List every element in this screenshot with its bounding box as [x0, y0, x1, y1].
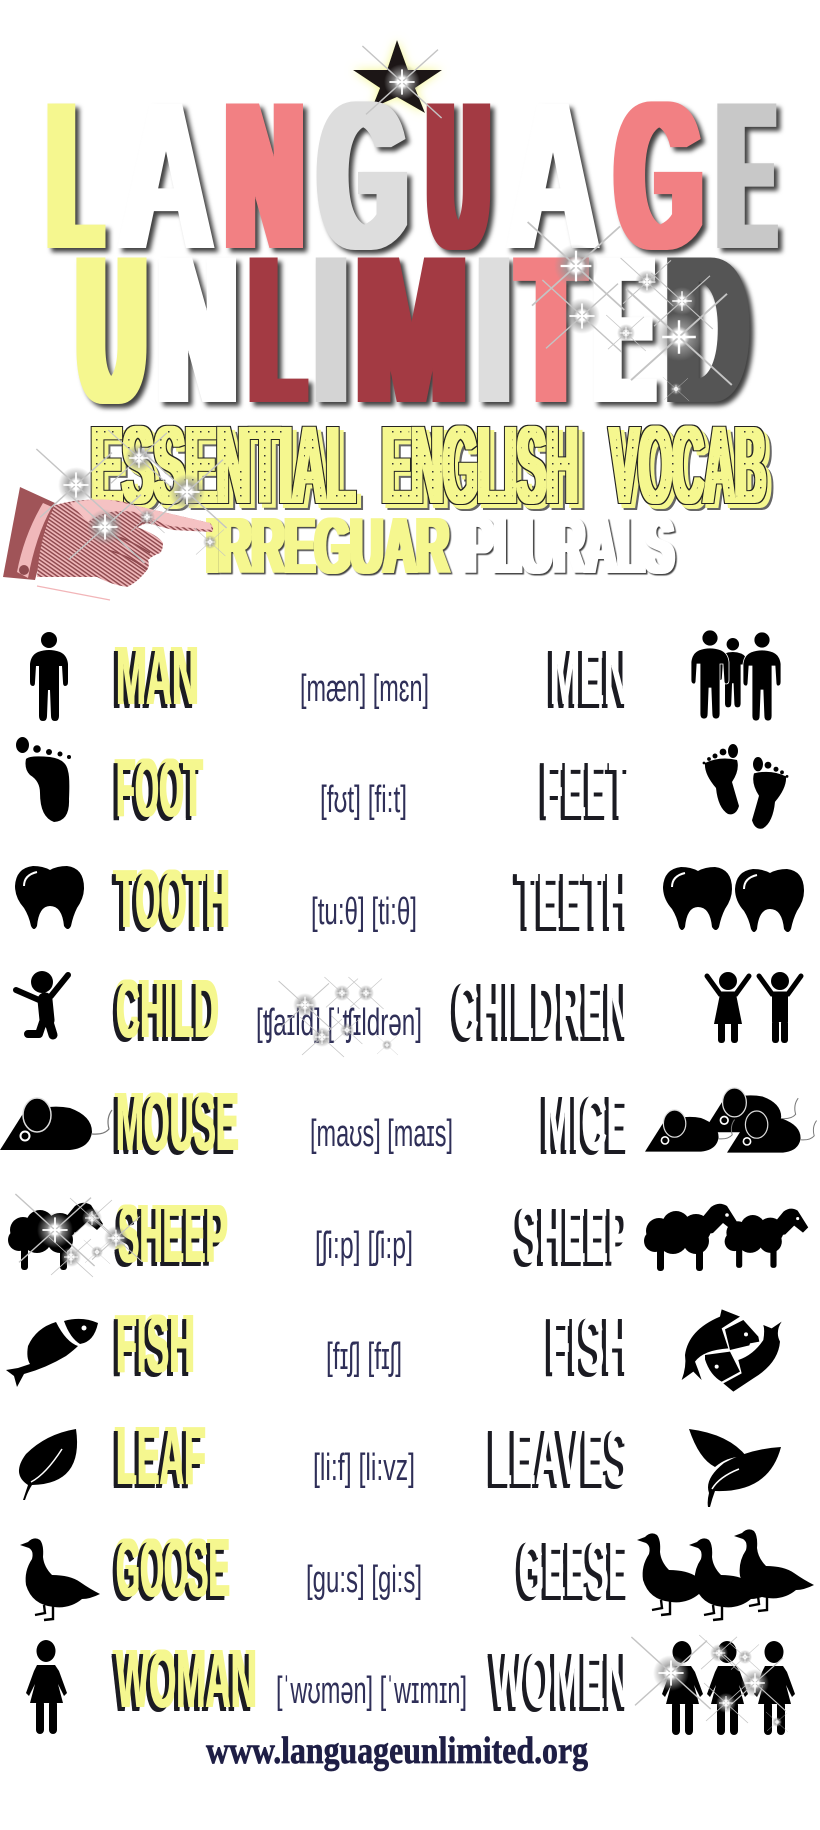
row: leaf / leaves: LEAVES: [486, 1414, 626, 1503]
row: foot / feet: [16, 737, 788, 835]
title line: LANGUAGE: G: [617, 58, 701, 293]
icon: star: [353, 40, 442, 113]
icon: sheep: [8, 1203, 103, 1270]
row: man / men: MEN: [546, 634, 626, 723]
icon: tooth: [15, 866, 84, 929]
title line: UNLIMITED: U: [79, 212, 144, 447]
icon: pisces fish: [682, 1309, 782, 1392]
sparkles on child row: [279, 977, 398, 1057]
row: tooth / teeth: TOOTH: [112, 857, 225, 946]
title line: UNLIMITED: I: [317, 212, 345, 447]
row: woman / women: [26, 1635, 795, 1735]
icon: man: [30, 632, 68, 721]
row: goose / geese: GEESE: [515, 1526, 626, 1615]
sparkles on sheep row: [15, 1194, 142, 1277]
row: sheep / sheep: SHEEP: [513, 1192, 626, 1281]
icon: geese: [637, 1529, 814, 1620]
icon: mice: [645, 1088, 817, 1153]
subtitle: Essential English Vocab: ESSENTIAL: [91, 404, 355, 527]
row: man / men: MAN: [112, 634, 194, 723]
title line: UNLIMITED: N: [160, 212, 235, 447]
row: goose / geese: [20, 1526, 814, 1620]
title line: UNLIMITED: [79, 212, 746, 447]
row: sheep / sheep: [8, 1192, 808, 1281]
pronunciation: goose geese: [gu:s] [gi:s]: [306, 1559, 422, 1601]
icon: fish: [6, 1319, 98, 1387]
icon: sheep plural: [644, 1204, 808, 1271]
pronunciation: fish fish: [fɪʃ] [fɪʃ]: [326, 1336, 402, 1378]
pronunciation: man men: [mæn] [mɛn]: [300, 668, 429, 710]
icon: children: [707, 972, 801, 1043]
title line: UNLIMITED: E: [596, 212, 652, 447]
website address: www.languageunlimited.org: [206, 1730, 588, 1772]
row: woman / women: WOMEN: [488, 1637, 626, 1726]
row: leaf / leaves: [19, 1414, 781, 1507]
pronunciation: foot feet: [fʊt] [fi:t]: [320, 779, 407, 821]
icon: men: [691, 630, 781, 721]
row: tooth / teeth: [15, 857, 804, 946]
row: child / children: [16, 967, 801, 1057]
icon: feet: [703, 744, 788, 829]
row: fish / fish: FISH: [112, 1302, 190, 1391]
row: goose / geese: GOOSE: [112, 1526, 225, 1615]
icon: teeth: [663, 867, 804, 932]
heading: Irregular Plurals: IRREGUAR: [206, 501, 449, 590]
title line: LANGUAGE: U: [430, 58, 487, 293]
row: foot / feet: FEET: [538, 746, 626, 835]
row: sheep / sheep: SHEEP: [114, 1192, 223, 1281]
icon: mouse: [0, 1098, 112, 1150]
row: foot / feet: FOOT: [112, 746, 198, 835]
icon: woman: [26, 1640, 67, 1734]
icon: child: [16, 971, 68, 1035]
pronunciation: tooth teeth: [tu:θ] [ti:θ]: [311, 891, 417, 933]
title line: LANGUAGE: G: [320, 58, 406, 293]
title line: LANGUAGE: N: [227, 58, 302, 293]
row: mouse / mice: MOUSE: [112, 1080, 234, 1169]
title line: UNLIMITED: M: [357, 212, 466, 447]
title line: LANGUAGE: [50, 58, 773, 293]
row: mouse / mice: MICE: [539, 1080, 626, 1169]
pronunciation: woman women: [ˈwʊmən] [ˈwɪmɪn]: [276, 1670, 467, 1712]
row: man / men: [30, 630, 781, 723]
sparkles on women row: [631, 1635, 788, 1732]
pronunciation: sheep sheep: [ʃi:p] [ʃi:p]: [315, 1225, 413, 1267]
pronunciation: mouse mice: [maʊs] [maɪs]: [310, 1113, 453, 1155]
pronunciation: child children: [ʧaɪld] [ˈʧɪldrən]: [256, 1002, 422, 1044]
sparkles on subtitle: [36, 430, 227, 563]
title line: UNLIMITED: D: [668, 212, 746, 447]
row: fish / fish: FISH: [544, 1302, 626, 1391]
icon: leaves: [689, 1429, 781, 1507]
row: fish / fish: [6, 1302, 782, 1392]
title line: LANGUAGE: A: [119, 58, 213, 293]
title line: UNLIMITED: I: [480, 212, 508, 447]
row: child / children: CHILD: [112, 967, 214, 1056]
icon: pointing hand: [3, 487, 213, 600]
icon: goose: [20, 1538, 100, 1620]
pronunciation: leaf leaves: [li:f] [li:vz]: [313, 1447, 415, 1489]
title: Language Unlimited: [50, 40, 773, 447]
icon: women: [662, 1641, 795, 1735]
title line: LANGUAGE: A: [508, 58, 598, 293]
title line: UNLIMITED: T: [520, 212, 582, 447]
icon: foot: [16, 737, 71, 822]
row: leaf / leaves: LEAF: [112, 1414, 201, 1503]
row: mouse / mice: [0, 1080, 817, 1169]
icon: leaf: [19, 1429, 77, 1500]
row: woman / women: WOMAN: [112, 1637, 252, 1726]
row: tooth / teeth: TEETH: [513, 857, 626, 946]
title line: UNLIMITED: L: [252, 212, 303, 447]
title line: LANGUAGE: L: [50, 58, 100, 293]
sparkles on title: [362, 46, 732, 401]
